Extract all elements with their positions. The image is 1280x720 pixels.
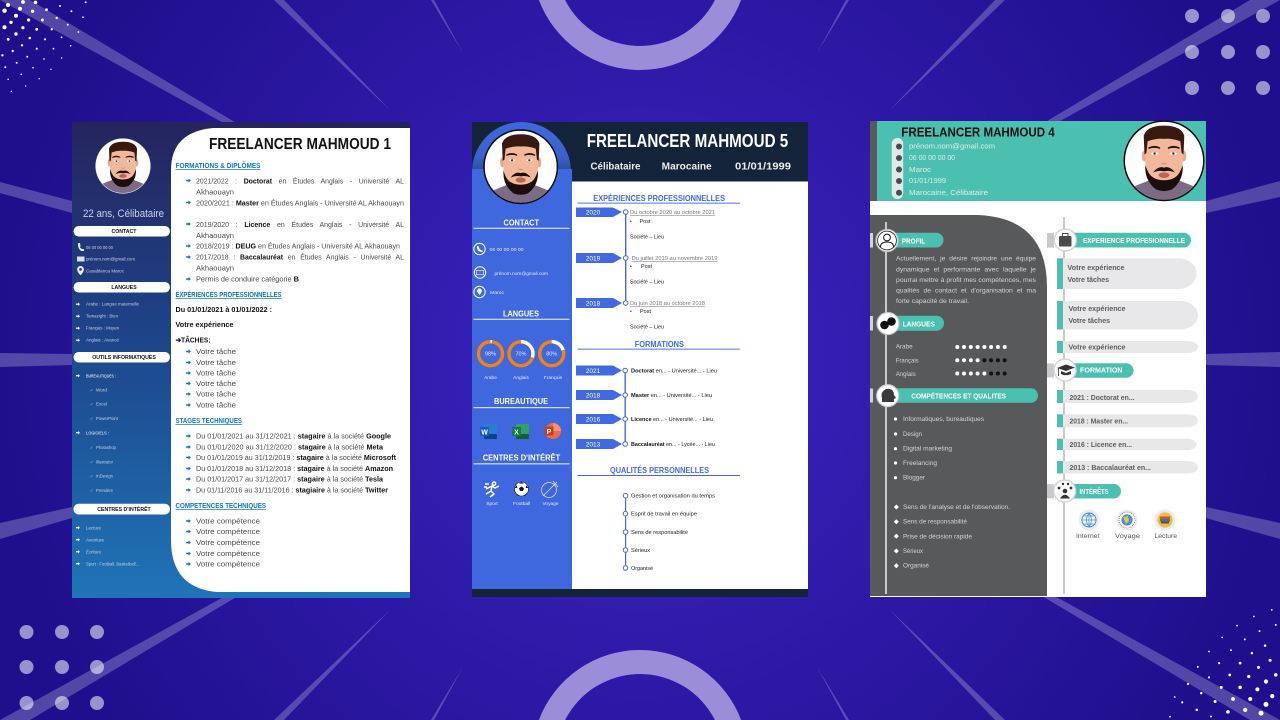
contact details: Casablanca Maroc: [86, 268, 124, 274]
experience section: EXPÉRIENCES PROFESSIONNELLES: [593, 194, 726, 203]
language ratings: Anglais: [896, 371, 916, 378]
language ratings: Arabe: [896, 344, 913, 350]
contact strip: Marocaine, Célibataire: [909, 190, 988, 197]
sidebar headings: [92, 229, 156, 513]
personal qualities section: Sens de responsabilité: [631, 530, 688, 536]
experience section: Société – Lieu: [630, 324, 664, 330]
section: interests: Voyage: [542, 501, 559, 507]
languages list: [76, 302, 140, 342]
section: experience: Votre tâche: [196, 347, 236, 356]
software skills: Word: [96, 388, 108, 392]
personal qualities section: Organisé: [631, 566, 653, 572]
personal qualities section: Sérieux: [631, 548, 651, 554]
personal qualities section: Gestion et organisation du temps: [631, 494, 716, 500]
education heading: FORMATION: [1080, 368, 1122, 374]
contact strip: 01/01/1999: [909, 178, 946, 185]
experience section: •: [630, 264, 632, 270]
section: internships: Du 01/01/2021 au 31/12/2021 : stagaire à la société Google: [196, 432, 391, 440]
icon: PowerPoint: P: [547, 429, 552, 436]
experience section: •: [630, 219, 632, 225]
section: office software: [474, 397, 570, 439]
section: experience: Votre expérience: [176, 320, 234, 329]
software skills: ✓: [90, 388, 94, 392]
contact details: [77, 243, 136, 275]
education section: 2021: [586, 368, 601, 375]
software skills: Excel: [96, 402, 107, 406]
avatar: [95, 138, 151, 194]
education cards: [1057, 390, 1198, 474]
contact details: prénom.nom@gmail.com: [86, 256, 136, 262]
contact strip: Maroc: [909, 167, 932, 174]
section: experience: Votre tâche: [196, 390, 236, 398]
section: internships: [176, 418, 397, 494]
icon: travel: [1116, 510, 1138, 530]
sidebar headings: LANGUES: [111, 285, 137, 291]
experience cards: Votre tâches: [1068, 318, 1110, 325]
icon: internet: [1078, 510, 1100, 530]
qualities list: Sérieux: [903, 548, 924, 555]
section: skills: COMPETENCES TECHNIQUES: [176, 503, 266, 510]
section: formations: Permis de conduire catégorie B: [196, 274, 299, 284]
skills list: Informatiques, bureautiques: [903, 416, 984, 423]
profile paragraph: forte capacité de travail.: [896, 298, 969, 305]
dot grid: bottom left: [20, 625, 104, 710]
experience section: Post: [640, 309, 652, 315]
section: experience: EXPÉRIENCES PROFESSIONNELLES: [176, 290, 282, 299]
section: skills: Votre compétence: [196, 560, 260, 568]
qualities list: Organisé: [903, 563, 929, 570]
section: interests: CENTRES D'INTÉRÊT: [483, 454, 560, 462]
sidebar headings: CONTACT: [112, 229, 137, 235]
experience section: Post: [640, 219, 651, 225]
section: languages: Anglais: [513, 375, 529, 381]
title: FREELANCER MAHMOUD 1: [209, 136, 391, 153]
qualities list: Sens de l'analyse et de l'observation.: [903, 504, 1010, 511]
personal details: Célibataire: [590, 162, 641, 172]
panel: CV 4: [870, 120, 1206, 597]
interests list: [76, 526, 139, 566]
section: skills: Votre compétence: [196, 549, 260, 558]
education section: 2013: [586, 442, 601, 448]
panel: CV 5: [472, 122, 808, 597]
sidebar headings: CENTRES D'INTÉRÊT: [97, 505, 152, 513]
section: experience: Votre tâche: [196, 358, 236, 367]
section: contact: prénom.nom@gmail.com: [494, 271, 548, 276]
section: languages: 70%: [515, 352, 527, 358]
software skills: ✓: [90, 488, 94, 493]
ring: bottom: [539, 650, 741, 720]
language ratings: Français: [896, 358, 919, 364]
section: formations: [176, 161, 404, 284]
profile paragraph: Actuellement, je désire rejoindre une équipe: [896, 256, 1036, 263]
dot grid: top right: [1185, 9, 1270, 95]
personal details: 01/01/1999: [735, 162, 791, 172]
section: skills: Votre compétence: [196, 516, 260, 526]
experience section: 2020: [586, 210, 601, 216]
section: internships: Du 01/01/2020 au 31/12/2020 : stagaire à la société Meta: [196, 442, 384, 452]
experience section: 2019: [586, 256, 601, 262]
experience cards: Votre expérience: [1068, 265, 1125, 272]
title: FREELANCER MAHMOUD 4: [901, 124, 1055, 140]
section: languages: LANGUES: [503, 310, 540, 318]
age and status: 22 ans, Célibataire: [83, 208, 164, 220]
panel: CV 1: [72, 122, 410, 598]
halftone dots: top left: [1, 0, 87, 92]
interests heading: [1047, 480, 1121, 502]
personal details: [590, 162, 791, 172]
experience cards: Votre tâches: [1068, 277, 1109, 284]
language ratings: [896, 344, 1007, 378]
experience section: Société – Lieu: [630, 234, 664, 240]
icon: Excel: X: [514, 430, 519, 436]
dark column: [870, 215, 1047, 596]
experience cards: Votre expérience: [1068, 306, 1126, 313]
icon: travel: [542, 481, 558, 498]
contact strip: prénom.nom@gmail.com: [909, 144, 995, 151]
languages list: Anglais : Avancé: [86, 338, 120, 342]
avatar: [1124, 120, 1204, 201]
experience section: Du juin 2018 au octobre 2018: [630, 301, 705, 307]
education cards: 2018 : Master en...: [1070, 418, 1128, 426]
experience section: 2018: [586, 300, 601, 308]
experience section: [576, 194, 740, 330]
timeline rails: [885, 217, 1065, 594]
section: interests: Sport: [486, 501, 498, 507]
personal qualities section: QUALITÉS PERSONNELLES: [610, 466, 710, 475]
section: skills: Votre compétence: [196, 527, 260, 536]
interest labels: Lecture: [1154, 533, 1177, 540]
title: FREELANCER MAHMOUD 5: [587, 131, 788, 151]
languages heading: [870, 312, 944, 334]
experience cards: [1057, 258, 1198, 353]
personal details: Marocaine: [662, 162, 712, 172]
software skills: ✓: [90, 416, 94, 421]
software skills: BUREAUTIQUES :: [86, 374, 116, 378]
education section: FORMATIONS: [635, 340, 685, 349]
software skills: Illustrator: [96, 460, 114, 464]
software skills: ✓: [90, 460, 94, 464]
section: interests: Football: [513, 501, 530, 507]
skills heading: [870, 385, 1038, 407]
section: formations: 2018/2019 : DEUG en Études Anglais - Université AL Akhaouayn: [196, 242, 400, 250]
skills list: Blogger: [903, 475, 926, 482]
section: formations: 2021/2022 : Doctorat en Études Anglais - Université AL: [196, 176, 404, 186]
section: experience: [176, 290, 282, 410]
languages heading: LANGUES: [903, 322, 935, 329]
software skills: ✓: [90, 474, 94, 478]
experience heading: EXPERIENCE PROFESIONNELLE: [1083, 238, 1185, 245]
section: internships: Du 01/01/2019 au 31/12/2019 : stagaire à la société Microsoft: [196, 453, 397, 462]
halftone dots: bottom right: [1169, 609, 1278, 718]
section: formations: Akhaouayn: [196, 264, 234, 272]
education cards: 2013 : Baccalauréat en...: [1070, 465, 1151, 472]
section: office software: BUREAUTIQUE: [494, 397, 549, 406]
year tags: [576, 208, 622, 308]
section: contact: CONTACT: [504, 218, 539, 228]
icon: football: [514, 482, 528, 496]
software skills: PowerPoint: [96, 416, 119, 421]
contact strip: [892, 138, 995, 199]
profile heading: PROFIL: [902, 238, 926, 246]
software skills: ✓: [90, 445, 94, 450]
skills heading: COMPÉTENCES ET QUALITES: [911, 392, 1006, 400]
section: formations: Akhaouayn: [196, 188, 234, 196]
icon: Word: W: [481, 430, 488, 436]
section: internships: Du 01/01/2018 au 31/12/2018 : stagaire à la société Amazon: [196, 464, 393, 473]
skills list: Digital marketing: [903, 446, 952, 453]
section: internships: Du 01/01/2017 au 31/12/2017 : stagaire à la société Tesla: [196, 474, 384, 484]
education heading: [1047, 359, 1134, 381]
section: interests: [474, 454, 570, 507]
contact strip: 06 00 00 00 00: [909, 155, 955, 162]
interests list: Aventure: [86, 538, 105, 542]
qualities list: Sens de responsabilité: [903, 519, 967, 526]
section: languages: Français: [544, 375, 563, 381]
interests list: Lecture: [86, 526, 102, 530]
personal qualities section: Esprit de travail en équipe: [631, 512, 697, 518]
section: experience: Du 01/01/2021 à 01/01/2022 :: [176, 305, 272, 314]
timeline nodes: [623, 210, 628, 305]
section: contact: Maroc: [490, 290, 505, 295]
software skills: ✓: [90, 402, 94, 406]
section: experience: ➔TÂCHES:: [176, 336, 210, 344]
education section: 2018: [586, 392, 601, 400]
section: languages: [474, 310, 570, 381]
section: internships: STAGES TECHNIQUES: [176, 418, 242, 425]
education cards: 2016 : Licence en...: [1070, 442, 1132, 449]
section: languages: 98%: [485, 352, 496, 358]
ring: top: [539, 0, 741, 70]
experience section: Du octobre 2020 au octobre 2021: [630, 210, 715, 216]
education section: Master en... - Université... - Lieu: [631, 393, 712, 399]
software skills: InDesign: [96, 474, 114, 478]
languages list: Arabe : Langue maternelle: [86, 302, 140, 306]
skills list: Freelancing: [903, 460, 937, 467]
experience section: Société – Lieu: [630, 280, 664, 286]
education section: [576, 340, 740, 449]
section: experience: Votre tâche: [196, 379, 236, 388]
section: experience: Votre tâche: [196, 368, 236, 378]
education section: Doctorat en... - Université... - Lieu: [631, 368, 717, 374]
sidebar headings: OUTILS INFORMATIQUES: [92, 355, 156, 361]
qualities list: [894, 504, 1010, 570]
main white area: [171, 128, 410, 592]
personal qualities section: [578, 466, 740, 572]
section: internships: Du 01/11/2016 au 31/11/2016 : stagiaire à la société Twitter: [196, 486, 388, 494]
skills list: [894, 416, 984, 482]
experience cards: Votre expérience: [1068, 344, 1126, 352]
section: formations: Akhaouayn: [196, 231, 234, 240]
interest labels: [1076, 533, 1177, 540]
section: experience: Votre tâche: [196, 400, 236, 410]
profile paragraph: [896, 256, 1036, 305]
experience section: Post: [641, 264, 653, 270]
languages list: Tamazight : Bien: [86, 314, 119, 318]
software skills: Première: [96, 488, 114, 493]
section: languages: 80%: [546, 352, 557, 358]
skills list: Design: [903, 431, 922, 438]
software skills: [76, 374, 119, 493]
interests heading: INTÉRÊTS: [1080, 487, 1109, 496]
section: languages: Arabe: [484, 375, 497, 381]
section: formations: FORMATIONS & DIPLÔMES: [176, 161, 261, 170]
section: contact: [474, 218, 570, 298]
icon: sport: [484, 482, 499, 497]
education section: Baccalauréat en... - Lycée... - Lieu: [631, 442, 715, 448]
avatar: [483, 129, 558, 204]
interest labels: Voyage: [1115, 533, 1140, 540]
section: formations: 2019/2020 : Licence en Études Anglais - Université AL: [196, 220, 404, 229]
section: skills: Votre compétence: [196, 538, 260, 547]
profile paragraph: pourrai mettre à profit mes compétences, mes: [896, 277, 1036, 284]
profile paragraph: dynamique et performante avec laquelle je: [896, 266, 1036, 274]
section: contact: 06 00 00 00 00: [490, 247, 524, 252]
qualities list: Prise de décision rapide: [903, 533, 972, 540]
icon: reading: [1154, 510, 1176, 530]
section: skills: [176, 503, 266, 568]
education section: 2016: [586, 416, 601, 424]
sidebar pills: [74, 226, 170, 514]
section: formations: 2017/2018 : Baccalauréat en Études Anglais - Université AL: [196, 252, 404, 262]
contact details: 06 00 00 00 00: [86, 245, 114, 250]
software skills: Photoshop: [96, 445, 117, 450]
section: formations: 2020/2021 : Master en Études Anglais - Université AL Akhaouayn: [196, 198, 404, 208]
experience section: •: [630, 309, 632, 315]
education section: Licence en... - Université... - Lieu: [631, 417, 713, 423]
experience heading: [1047, 229, 1191, 251]
software skills: LOGICIELS :: [86, 430, 109, 436]
experience section: Du juillet 2019 au novembre 2019: [632, 256, 718, 262]
interest labels: Internet: [1076, 533, 1100, 540]
interests list: Sport : Football, Basketball...: [86, 562, 139, 566]
languages list: Français : Moyen: [86, 326, 120, 330]
profile paragraph: qualités de contact et d'organisation et ma: [896, 288, 1036, 294]
profile heading: [870, 230, 944, 252]
education cards: 2021 : Doctorat en...: [1070, 395, 1135, 402]
interests list: Écriture: [86, 550, 102, 554]
